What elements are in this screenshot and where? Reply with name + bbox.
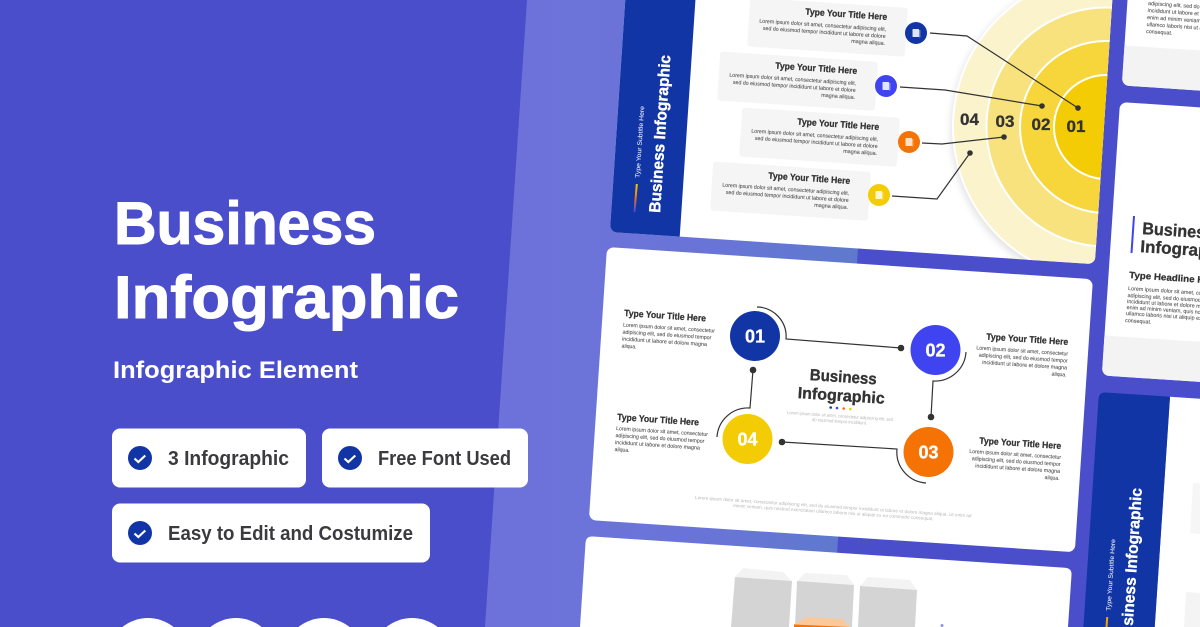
grey column 1: [731, 568, 792, 627]
item 1 card: sed do eiusmod tempor incididunt ut labore et dolore: [763, 26, 886, 40]
feature pill: Easy to Edit and Costumize: Easy to Edit and Costumize: [168, 523, 413, 545]
text block 03: aliqua.: [1044, 475, 1060, 482]
panel: text slide, middle right: [1102, 102, 1200, 408]
feature pill: 3 Infographic: 3 Infographic: [168, 448, 289, 470]
center caption: Lorem ipsum dolor sit amet, consectetur adipiscing elit, sed: [787, 410, 893, 422]
slide heading: [1140, 219, 1200, 262]
step 04: [722, 414, 772, 464]
center dots: [829, 406, 852, 410]
center caption: do eiusmod tempor incididunt.: [812, 417, 867, 426]
panel: cycle infographic slide: [589, 247, 1093, 552]
item 2 card: Type Your Title Here: [775, 61, 858, 76]
item 3 card: Type Your Title Here: [797, 117, 880, 132]
grey item card: [1184, 592, 1200, 627]
step 04: 04: [737, 430, 758, 450]
text block 04: [614, 412, 708, 454]
panel: radial infographic slide: [610, 0, 1112, 264]
body text fragment: [1146, 1, 1200, 37]
text block 02: Type Your Title Here: [986, 332, 1069, 347]
item 3 card: [739, 108, 900, 167]
grey column 3: [858, 577, 917, 627]
text block 04: Type Your Title Here: [617, 412, 699, 427]
main title: Business: [114, 190, 376, 257]
text block 04: incididunt ut labore et dolore magna: [615, 440, 700, 452]
text block 02: incididunt ut labore et dolore magna: [982, 360, 1067, 371]
center heading: Infographic: [797, 385, 885, 408]
text block 03: adipiscing elit, sed do eiusmod tempor: [972, 456, 1061, 468]
sidebar: [1083, 392, 1170, 627]
ring numbers: 04: [960, 110, 979, 129]
item 4 card: sed do eiusmod tempor incididunt ut labore et dolore: [726, 190, 849, 204]
text block 04: adipiscing elit, sed do eiusmod tempor: [615, 433, 705, 445]
item 1 card: Type Your Title Here: [805, 7, 888, 22]
grey item card: [1190, 483, 1200, 534]
text block 03: Type Your Title Here: [979, 436, 1062, 451]
item 4 card: Lorem ipsum dolor sit amet, consectetur adipiscing elit,: [722, 183, 850, 197]
sidebar title: Business Infographic: [647, 54, 674, 213]
orange column top: [793, 617, 850, 627]
feature pill: 3 Infographic: [112, 428, 306, 488]
sidebar: [610, 0, 698, 237]
item 1 card: magna aliqua.: [851, 39, 885, 47]
ring numbers: 02: [1032, 115, 1050, 134]
text block 01: aliqua.: [621, 344, 637, 350]
panel: text slide, top right: [1122, 0, 1200, 118]
text block 01: adipiscing elit, sed do eiusmod tempor: [622, 330, 712, 341]
step 01: [730, 311, 780, 361]
text block 04: Lorem ipsum dolor sit amet, consectetur: [616, 426, 708, 438]
item 3 card: Lorem ipsum dolor sit amet, consectetur adipiscing elit,: [751, 129, 879, 143]
sidebar subtitle: Type Your Subtitle Here: [635, 105, 646, 178]
body text: [1125, 286, 1200, 326]
body text fragment: consequat.: [1146, 29, 1173, 37]
circular connector arcs and lines: [717, 307, 966, 483]
ring numbers: 01: [1067, 117, 1085, 136]
concentric rings: [949, 0, 1112, 264]
item 1 card: [747, 0, 908, 57]
text block 02: adipiscing elit, sed do eiusmod tempor: [979, 353, 1068, 365]
sidebar accent line: [634, 184, 638, 212]
footer caption: minim veniam, quis nostrud exercitation ullamco laboris nisi ut aliquip ex ea commodo consequat.: [733, 503, 934, 521]
main title: [114, 190, 459, 331]
body text: consequat.: [1125, 318, 1152, 326]
text block 01: Lorem ipsum dolor sit amet, consectetur: [623, 323, 715, 335]
text block 02: aliqua.: [1051, 372, 1067, 378]
text block 01: [621, 308, 715, 350]
slide body: [1155, 397, 1200, 627]
icon: book, navy: [905, 22, 927, 44]
connector lines: [892, 33, 1081, 199]
panel: 3D bars slide: [580, 536, 1072, 627]
item 2 card: magna aliqua.: [821, 93, 855, 101]
item 3 card: sed do eiusmod tempor incididunt ut labore et dolore: [755, 136, 878, 150]
text block 03: incididunt ut labore et dolore magna: [975, 463, 1060, 475]
icon: book, orange: [898, 131, 920, 153]
feature pill: Free Font Used: Free Font Used: [378, 448, 511, 470]
text block 02: Lorem ipsum dolor sit amet, consectetur: [976, 345, 1068, 358]
text block 04: aliqua.: [614, 447, 630, 454]
text block 01: Type Your Title Here: [624, 308, 706, 323]
panel: radial slide, bottom right: [1083, 392, 1200, 627]
accent bar: [1130, 216, 1135, 253]
step 01: 01: [745, 326, 765, 346]
step 03: 03: [918, 442, 939, 462]
small marker: [940, 624, 944, 627]
item 2 card: sed do eiusmod tempor incididunt ut labore et dolore: [733, 80, 856, 94]
step 03: [904, 427, 954, 477]
feature pill: Free Font Used: [322, 428, 528, 488]
icon: book, blue: [875, 75, 897, 97]
item 1 card: Lorem ipsum dolor sit amet, consectetur adipiscing elit,: [759, 19, 887, 33]
text block 03: [969, 436, 1062, 482]
center heading: Business: [809, 367, 877, 388]
subtitle: Infographic Element: [113, 357, 358, 384]
lighter diagonal band: [485, 0, 875, 627]
item 4 card: Type Your Title Here: [768, 171, 851, 186]
icon: book, yellow: [868, 184, 890, 206]
text block 02: [976, 332, 1069, 378]
sidebar accent line: [1106, 617, 1108, 627]
sidebar title: siness Infographic: [1120, 487, 1146, 626]
grey column 2: [795, 573, 854, 627]
item 4 card: magna aliqua.: [814, 203, 848, 211]
text block 03: Lorem ipsum dolor sit amet, consectetur: [969, 449, 1061, 461]
ring numbers: 03: [996, 112, 1014, 131]
feature pill: Easy to Edit and Costumize: [112, 504, 430, 562]
item 4 card: [710, 162, 871, 221]
step 02: 02: [925, 340, 946, 360]
footer caption: Lorem ipsum dolor sit amet, consectetur adipiscing elit, sed do eiusmod tempor incididunt ut labore et dolore magna aliqua. Ut enim ad: [695, 495, 972, 518]
item 3 card: magna aliqua.: [843, 149, 877, 157]
ring numbers: [960, 110, 1085, 136]
step 02: [910, 325, 960, 375]
sidebar subtitle: Type Your Subtitle Here: [1106, 538, 1117, 611]
item 2 card: [717, 52, 878, 111]
center heading: [797, 367, 885, 408]
main title: Infographic: [114, 264, 459, 331]
text block 01: incididunt ut labore et dolore magna: [622, 337, 707, 348]
software icons row: [122, 618, 438, 627]
item 2 card: Lorem ipsum dolor sit amet, consectetur adipiscing elit,: [729, 73, 857, 87]
